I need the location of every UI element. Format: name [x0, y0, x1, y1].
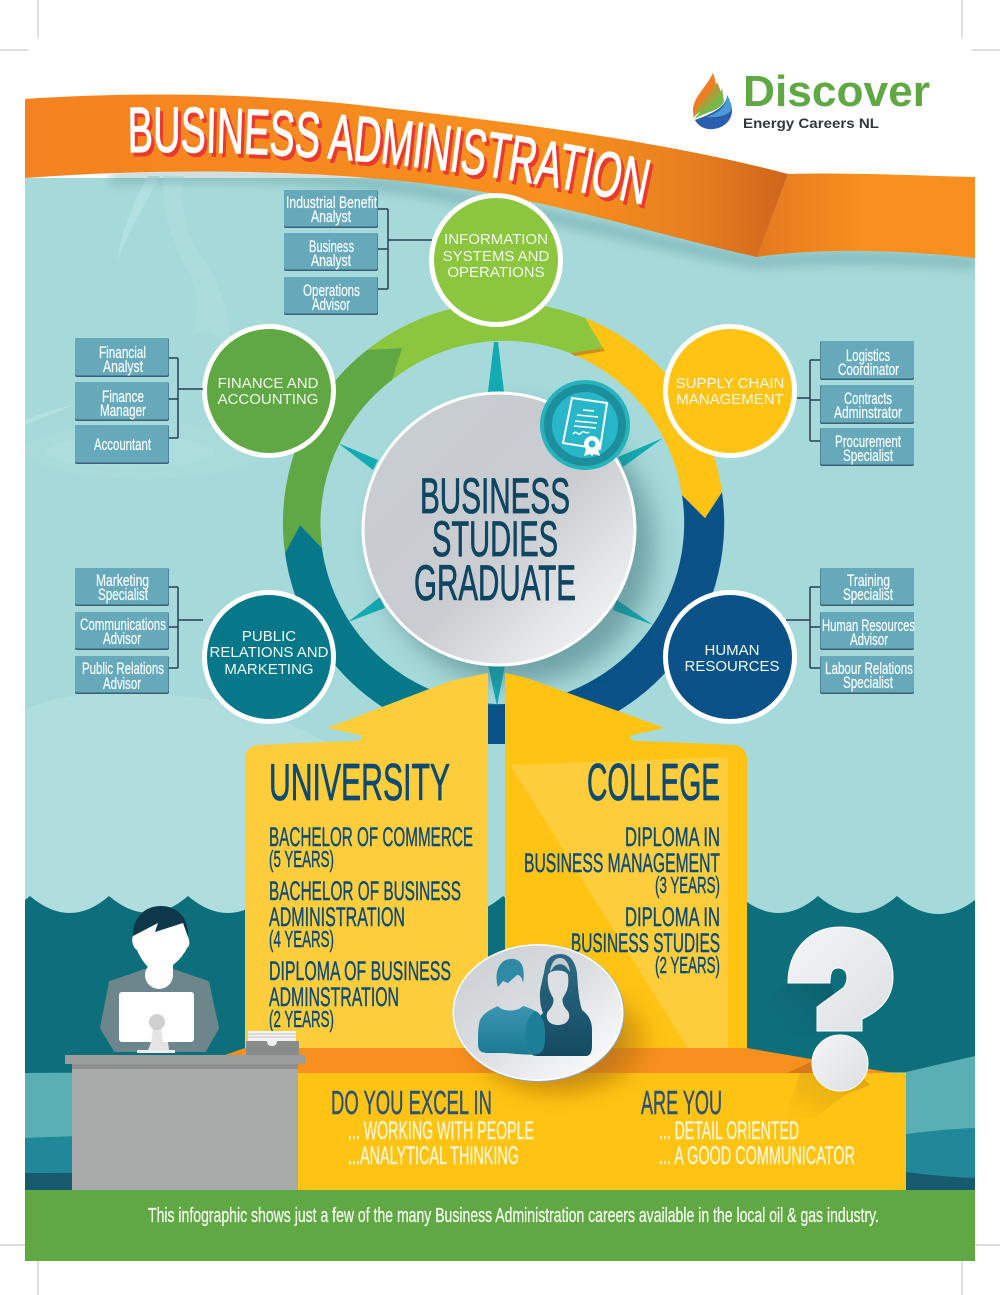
list: are you: ... DETAIL ORIENTED: [659, 1117, 799, 1145]
title banner: [25, 94, 975, 258]
jobs: supply chain: Coordinator: [838, 360, 899, 379]
jobs: supply chain: [797, 341, 914, 466]
jobs: marketing: Public Relations: [82, 659, 164, 678]
lower yellow block: [298, 1073, 906, 1190]
arrow: college: [505, 673, 747, 1048]
node: supply chain management: MANAGEMENT: [676, 391, 784, 408]
programs: university: DIPLOMA OF BUSINESS: [269, 956, 451, 986]
node: public relations and marketing: PUBLIC: [242, 628, 296, 645]
jobs: information systems: Industrial Benefit: [286, 193, 377, 212]
people medallion: [452, 944, 624, 1082]
jobs: information systems: Operations: [303, 281, 360, 300]
list: are you: ... A GOOD COMMUNICATOR: [659, 1142, 855, 1170]
jobs: information systems: Analyst: [311, 251, 351, 270]
programs: college: BUSINESS STUDIES: [571, 928, 720, 958]
icon: diploma badge: [540, 380, 630, 470]
jobs: human resources: [786, 568, 915, 694]
ring: finance: [283, 348, 402, 553]
jobs: supply chain: Specialist: [843, 446, 893, 465]
list: are you: [659, 1117, 855, 1170]
list: excel: ...ANALYTICAL THINKING: [348, 1142, 519, 1170]
node: finance and accounting: FINANCE AND: [218, 375, 319, 392]
panel: are you: [641, 1084, 855, 1170]
plate heading: [414, 468, 576, 611]
icon: flame: [693, 73, 732, 129]
jobs: human resources: Training: [847, 571, 890, 590]
plate heading: GRADUATE: [414, 555, 576, 611]
person at computer: [101, 906, 218, 1053]
jobs: human resources: Advisor: [850, 630, 888, 649]
question mark shadow: [763, 965, 835, 1042]
jobs: human resources: Specialist: [843, 585, 893, 604]
node: information systems: INFORMATION: [444, 231, 548, 248]
jobs: marketing: Communications: [80, 615, 166, 634]
jobs: finance: Accountant: [94, 435, 151, 454]
jobs: supply chain: Adminstrator: [834, 403, 902, 422]
jobs: marketing: Specialist: [98, 585, 148, 604]
node: human resources: RESOURCES: [684, 658, 780, 675]
banner main ribbon: [25, 95, 788, 257]
jobs: finance: Manager: [100, 401, 146, 420]
node: information systems: [432, 196, 560, 324]
node: supply chain management: SUPPLY CHAIN: [676, 375, 784, 392]
node: supply chain management: [666, 326, 794, 456]
list: excel: [348, 1117, 534, 1170]
smoke wisps decoration: [25, 176, 330, 930]
programs: university: (5 YEARS): [269, 846, 334, 872]
node: human resources: [666, 592, 794, 722]
ring: human resources: [503, 492, 724, 743]
programs: college: BUSINESS MANAGEMENT: [524, 848, 720, 878]
heading: university: UNIVERSITY: [269, 754, 450, 812]
jobs: human resources: Human Resources: [822, 616, 915, 635]
jobs: information systems: Business: [309, 237, 354, 256]
programs: university: ADMINISTRATION: [269, 902, 405, 932]
jobs: human resources: Labour Relations: [825, 659, 913, 678]
programs: university: [269, 822, 473, 1032]
dot shadow on platform: [787, 1060, 825, 1073]
person hair: [133, 906, 188, 955]
programs: university: BACHELOR OF BUSINESS: [269, 876, 461, 906]
orange platform: [225, 1048, 893, 1073]
plate disc: [363, 393, 635, 665]
list: excel: ... WORKING WITH PEOPLE: [348, 1117, 534, 1145]
node: finance and accounting: [204, 326, 334, 456]
person body: [101, 970, 218, 1051]
arrow: university: [245, 673, 488, 1048]
node: public relations and marketing: MARKETING: [224, 661, 314, 678]
icon: monitor: [119, 992, 194, 1053]
spokes: [338, 342, 663, 706]
plate heading: BUSINESS: [420, 468, 570, 524]
ring: supply chain: [570, 318, 722, 518]
jobs: human resources: Specialist: [843, 673, 893, 692]
programs: college: DIPLOMA IN: [625, 902, 720, 932]
node: public relations and marketing: RELATIONS AND: [210, 644, 329, 661]
programs: college: [524, 822, 720, 978]
icon: man: [478, 959, 545, 1055]
sea waves: [25, 896, 975, 1190]
plate shadow: [378, 408, 654, 684]
arrow shadow: [570, 348, 605, 356]
dot shadow: [792, 1073, 870, 1112]
wordmark: Discover: [743, 67, 930, 116]
panel: university: [269, 754, 473, 1032]
node: finance and accounting: ACCOUNTING: [218, 391, 318, 408]
panel: do you excel in: [331, 1084, 534, 1170]
icon: woman: [528, 954, 592, 1056]
jobs: information systems: [284, 190, 432, 315]
programs: university: (2 YEARS): [269, 1006, 334, 1032]
icon: question mark: [788, 927, 893, 1091]
programs: university: ADMINSTRATION: [269, 982, 399, 1012]
desk: [65, 1031, 305, 1190]
programs: college: (2 YEARS): [655, 952, 720, 978]
node: public relations and marketing: [204, 592, 334, 722]
person neck: [145, 961, 173, 989]
node: human resources: HUMAN: [704, 642, 760, 659]
jobs: finance: Finance: [102, 387, 144, 406]
jobs: supply chain: Contracts: [844, 389, 892, 408]
programs: university: BACHELOR OF COMMERCE: [269, 822, 473, 852]
person face: [132, 923, 189, 972]
footer bar: [25, 1190, 975, 1261]
heading: are you: ARE YOU: [641, 1084, 722, 1121]
jobs: finance: Analyst: [103, 357, 143, 376]
ring: public relations: [285, 525, 503, 743]
tagline: Energy Careers NL: [743, 115, 879, 131]
programs: college: (3 YEARS): [655, 872, 720, 898]
jobs: finance: [75, 338, 203, 464]
jobs: marketing: Advisor: [103, 674, 141, 693]
background sky: [25, 178, 975, 958]
logo: [693, 67, 930, 131]
node: information systems: OPERATIONS: [447, 264, 545, 281]
jobs: marketing: Marketing: [96, 571, 149, 590]
heading: excel: DO YOU EXCEL IN: [331, 1084, 492, 1121]
programs: university: (4 YEARS): [269, 926, 334, 952]
jobs: supply chain: Procurement: [835, 432, 901, 451]
title: BUSINESS ADMINISTRATION: [130, 106, 654, 208]
people medallion shadow: [458, 975, 658, 1105]
jobs: supply chain: Logistics: [846, 346, 890, 365]
central plate: [363, 393, 654, 684]
paper tray: [246, 1031, 299, 1055]
panel: college: [524, 754, 720, 978]
career ring: [283, 302, 724, 744]
jobs: marketing: Advisor: [103, 629, 141, 648]
node: information systems: SYSTEMS AND: [443, 248, 550, 265]
ring: information systems: [367, 302, 603, 380]
shadow under banner: [110, 175, 975, 263]
banner right fold: [757, 173, 975, 258]
jobs: information systems: Analyst: [311, 207, 351, 226]
jobs: information systems: Advisor: [312, 295, 350, 314]
programs: college: DIPLOMA IN: [625, 822, 720, 852]
heading: college: COLLEGE: [587, 754, 720, 812]
plate heading: STUDIES: [432, 511, 558, 567]
jobs: finance: Financial: [99, 343, 146, 362]
centre link: [488, 705, 505, 744]
jobs: marketing: [75, 568, 203, 694]
